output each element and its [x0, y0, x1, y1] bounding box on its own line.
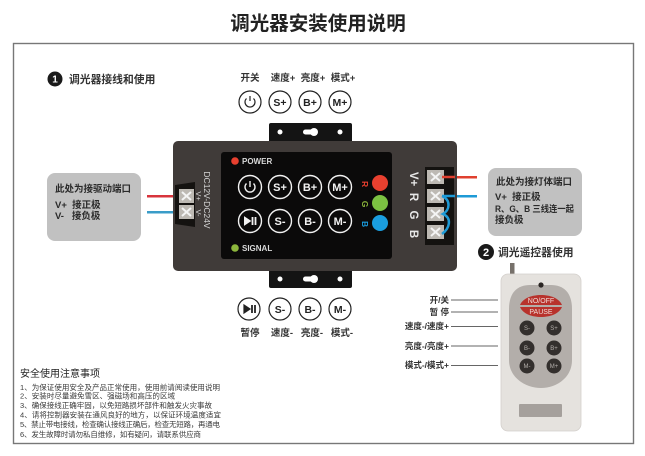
remote body — [501, 274, 581, 431]
remote buttons: S- — [524, 326, 530, 332]
remote label plate — [519, 404, 562, 417]
top button labels — [240, 72, 356, 84]
bottom button labels: 暂停 — [240, 327, 260, 339]
top outer buttons: M+ — [333, 97, 347, 109]
bottom outer buttons: M- — [334, 304, 347, 316]
remote button area — [509, 285, 572, 388]
left terminal — [175, 182, 195, 227]
panel buttons: S- — [274, 216, 286, 228]
LED — [538, 282, 544, 288]
left terminal print: V+ — [194, 191, 203, 201]
safety notes: 3、确保接线正确牢固，以免短路损坏部件和触发火灾事故 — [20, 400, 212, 410]
heading: wiring and use — [48, 72, 155, 86]
bottom button labels — [240, 327, 353, 339]
top button labels: 亮度+ — [301, 72, 326, 84]
safety notes — [20, 367, 222, 439]
safety notes: 2、安装时尽量避免雪区、强磁场和高压的区域 — [20, 390, 176, 400]
remote buttons: B- — [524, 346, 530, 352]
safety notes: 6、发生故障时请勿私自维修，如有疑问，请联系供应商 — [20, 429, 202, 439]
callout: light port — [488, 168, 582, 236]
device — [173, 123, 457, 288]
top button labels: 速度+ — [271, 72, 296, 84]
callout: light port: R、G、B 三线连一起 — [495, 203, 574, 214]
panel buttons: M- — [334, 216, 347, 228]
remote labels — [405, 295, 449, 370]
RGB indicators — [360, 175, 388, 231]
remote labels: 开/关 — [430, 295, 449, 305]
bottom outer buttons: S- — [275, 304, 286, 316]
callout: driver port: V- 接负极 — [55, 210, 101, 222]
remote labels: 亮度-/亮度+ — [405, 341, 449, 351]
bottom outer buttons: B- — [304, 304, 316, 316]
top outer buttons: B+ — [303, 97, 317, 109]
antenna — [510, 263, 514, 275]
heading: wiring and use: 1 — [52, 74, 58, 86]
mounting tab top — [269, 123, 352, 141]
heading: remote use: 2 — [483, 247, 489, 259]
panel buttons: B- — [304, 216, 316, 228]
panel buttons: M+ — [332, 182, 348, 194]
bottom button labels: 速度- — [271, 327, 293, 339]
top button labels: 模式+ — [331, 72, 356, 84]
left terminal print: V- — [194, 209, 203, 217]
right terminal print: G — [407, 211, 419, 220]
remote labels: 速度-/速度+ — [405, 321, 449, 331]
heading: wiring and use: 调光器接线和使用 — [69, 72, 155, 86]
panel buttons — [238, 176, 352, 232]
callout: light port: 此处为接灯体端口 — [496, 176, 572, 188]
on/off and pause button: PAUSE — [529, 309, 553, 316]
callout: light port: 接负极 — [495, 214, 524, 226]
left terminal print — [194, 171, 212, 229]
remote labels: 暂 停 — [430, 307, 449, 317]
remote leader lines — [451, 300, 498, 366]
left terminal print: DC12V-DC24V — [202, 171, 212, 229]
bottom button labels: 模式- — [331, 327, 353, 339]
right terminal print: R — [407, 193, 419, 202]
safety notes: 5、禁止带电接线，检查确认接线正确后，检查无短路，再通电 — [20, 419, 220, 429]
top button labels: 开关 — [240, 72, 260, 84]
callout: driver port: 此处为接驱动端口 — [55, 183, 131, 195]
wires right — [440, 176, 477, 198]
wires left — [147, 195, 181, 214]
remote buttons — [520, 320, 562, 374]
RGB indicators: B — [360, 221, 370, 227]
safety notes: 安全使用注意事项 — [20, 367, 100, 380]
callout: driver port: V+ 接正极 — [55, 199, 101, 211]
top outer buttons — [239, 91, 351, 113]
device body — [173, 141, 457, 271]
panel buttons: S+ — [273, 182, 287, 194]
heading: remote use: 调光遥控器使用 — [498, 245, 574, 259]
on/off and pause button: NO/OFF — [528, 298, 554, 305]
RGB indicators: R — [360, 181, 370, 187]
top outer buttons: S+ — [273, 97, 287, 109]
signal indicator: SIGNAL — [242, 244, 272, 253]
safety notes: 1、为保证使用安全及产品正常使用，使用前请阅读使用说明 — [20, 382, 220, 392]
remote labels: 模式-/模式+ — [405, 360, 449, 370]
RGB indicators: G — [360, 201, 370, 208]
callout: driver port — [47, 173, 141, 241]
panel buttons: B+ — [303, 182, 317, 194]
mounting tab bottom — [269, 271, 352, 288]
remote control — [501, 263, 581, 431]
callout: light port: V+ 接正极 — [495, 191, 541, 203]
right terminal — [425, 167, 455, 245]
on/off and pause button — [520, 295, 562, 317]
bottom outer buttons — [238, 298, 351, 320]
remote buttons: B+ — [550, 346, 558, 352]
power indicator: POWER — [242, 157, 272, 166]
remote buttons: M- — [524, 364, 530, 370]
remote buttons: S+ — [550, 326, 558, 332]
safety notes: 4、请将控制器安装在通风良好的地方，以保证环境温度适宜 — [20, 410, 222, 420]
title: 调光器安装使用说明 — [230, 13, 406, 35]
right terminal print: V+ — [407, 172, 419, 186]
control panel — [221, 152, 392, 259]
bottom button labels: 亮度- — [301, 327, 323, 339]
heading: remote use — [478, 244, 574, 260]
remote buttons: M+ — [550, 364, 559, 370]
right terminal print: B — [407, 230, 419, 238]
right terminal print — [407, 172, 419, 238]
